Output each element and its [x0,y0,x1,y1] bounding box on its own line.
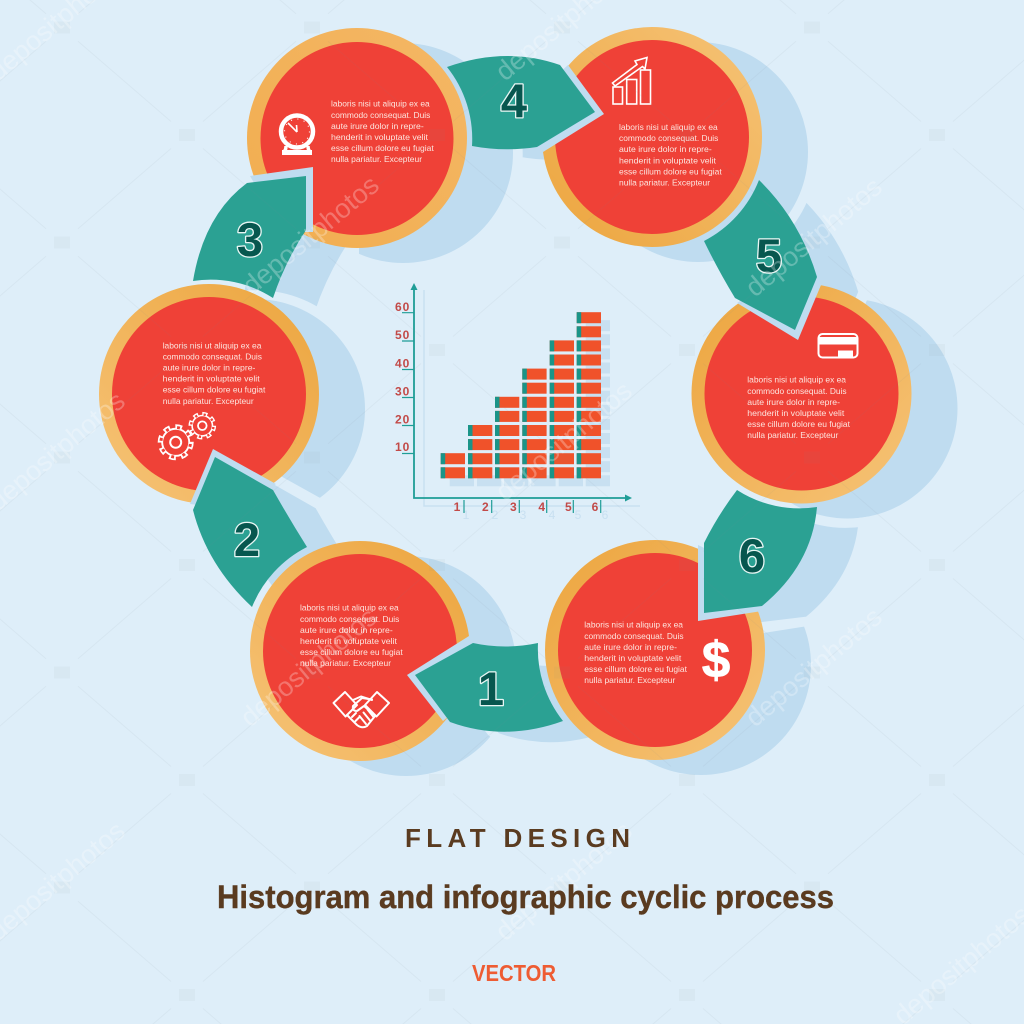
watermarks: depositphotos [490,816,638,947]
icon: clock [281,116,313,155]
y axis labels: 10 [395,440,410,454]
chart shadow: 2 [492,508,499,522]
text block: dollar circle: nulla pariatur. Excepteur [584,675,675,685]
text block: dollar circle: henderit in voluptate velit [584,653,682,663]
text block: clock circle: nulla pariatur. Excepteur [331,154,422,164]
arrow 1 [415,643,563,732]
text block: credit card circle: nulla pariatur. Excepteur [747,430,838,440]
small gear [190,414,214,438]
panel: growth chart circle [542,27,762,247]
large gear [160,426,192,458]
arrow 2: 2 [234,513,260,566]
icon: dollar sign: $ [702,631,730,688]
text block: gears circle: commodo consequat. Duis [163,351,263,361]
text block: dollar circle: commodo consequat. Duis [584,631,684,641]
arrow 5: 5 [756,229,782,282]
arrow 4: 4 [501,74,527,127]
text block: gears circle: aute irure dolor in repre- [163,362,255,372]
text block: credit card circle: esse cillum dolore eu fugiat [747,419,851,429]
icon: credit card [818,334,858,358]
arrow 3 [193,176,306,298]
panel: dollar circle [545,540,765,760]
arrow 2 [193,457,307,607]
chart bars [441,312,601,478]
text block: growth chart circle: aute irure dolor in repre- [619,144,712,154]
text block: clock circle [331,99,434,164]
text block: handshake circle: commodo consequat. Duis [300,614,400,624]
icon: gears [160,414,214,458]
x axis labels: 4 [538,500,545,514]
text block: clock circle: commodo consequat. Duis [331,110,431,120]
y axis labels: 40 [395,356,410,370]
text block: gears circle: henderit in voluptate velit [163,374,260,384]
text block: credit card circle: aute irure dolor in repre- [747,397,840,407]
text block: clock circle: henderit in voluptate velit [331,132,429,142]
x axis labels: 6 [592,500,599,514]
text block: credit card circle: laboris nisi ut aliquip ex ea [747,375,846,385]
text block: handshake circle: esse cillum dolore eu fugiat [300,647,403,657]
text block: growth chart circle [619,122,722,188]
x axis labels: 1 [454,500,461,514]
text block: dollar circle: esse cillum dolore eu fugiat [584,664,688,674]
text block: growth chart circle: esse cillum dolore eu fugiat [619,166,722,176]
text block: dollar circle: aute irure dolor in repre- [584,642,677,652]
text block: growth chart circle: commodo consequat. Duis [619,133,719,143]
text block: growth chart circle: laboris nisi ut aliquip ex ea [619,122,718,132]
notches cut into the circles [190,65,821,721]
chart axes [402,283,632,513]
text block: gears circle: esse cillum dolore eu fugiat [163,385,266,395]
y axis labels [395,300,410,454]
icon: growth chart [612,58,650,104]
panel: credit card circle [692,284,912,504]
chart shadow: 1 [463,508,470,522]
panel: gears circle [99,284,319,504]
watermarks: depositphotos [490,376,638,507]
text block: handshake circle: aute irure dolor in repre- [300,625,393,635]
text block: dollar circle [584,620,688,685]
x axis labels: 2 [482,500,489,514]
chart shadow: 4 [549,508,556,522]
chart shadow: 6 [602,508,609,522]
arrow 3: 3 [237,213,263,266]
chart shadow [424,290,640,522]
bar chart [395,283,640,522]
y axis labels: 30 [395,384,410,398]
panel: handshake circle [250,541,470,761]
x axis labels: 3 [510,500,517,514]
text block: handshake circle: laboris nisi ut aliquip ex ea [300,603,399,613]
title: Histogram and infographic cyclic process [217,879,834,915]
arrow 1: 1 [478,662,504,715]
drop shadows of the cycle [145,42,958,776]
text block: credit card circle: commodo consequat. Duis [747,386,847,396]
text block: clock circle: aute irure dolor in repre- [331,121,424,131]
y axis labels: 20 [395,412,410,426]
arrow 6 [704,490,817,613]
text block: gears circle: nulla pariatur. Excepteur [163,396,254,406]
text block: clock circle: esse cillum dolore eu fugiat [331,143,434,153]
text block: handshake circle: nulla pariatur. Excepteur [300,658,391,668]
heading: flat design: FLAT DESIGN [405,823,630,853]
arrow 4 [447,56,595,149]
watermarks: depositphotos [237,170,385,301]
x axis labels [454,500,599,514]
y axis labels: 50 [395,328,410,342]
vector label: VECTOR [472,960,556,986]
watermarks: depositphotos [235,602,383,733]
chart shadow: 5 [575,508,582,522]
icon: handshake [334,692,389,727]
y axis labels: 60 [395,300,410,314]
text block: gears circle: laboris nisi ut aliquip ex ea [163,340,262,350]
text block: dollar circle: laboris nisi ut aliquip ex ea [584,620,683,630]
chart shadow: 3 [520,508,527,522]
arrow 6: 6 [739,529,765,582]
panel: clock circle [247,28,467,248]
watermarks: depositphotos [740,602,888,733]
x axis labels: 5 [565,500,572,514]
text block: growth chart circle: henderit in voluptate velit [619,155,717,165]
text block: handshake circle [300,603,403,668]
watermarks: depositphotos [740,172,888,303]
text block: credit card circle: henderit in voluptate velit [747,408,845,418]
arrow 5 [704,180,817,330]
chart bar teal edges [441,312,581,478]
text block: credit card circle [747,375,851,440]
text block: gears circle [163,340,266,406]
text block: handshake circle: henderit in voluptate velit [300,636,398,646]
text block: clock circle: laboris nisi ut aliquip ex ea [331,99,430,109]
text block: growth chart circle: nulla pariatur. Excepteur [619,178,710,188]
